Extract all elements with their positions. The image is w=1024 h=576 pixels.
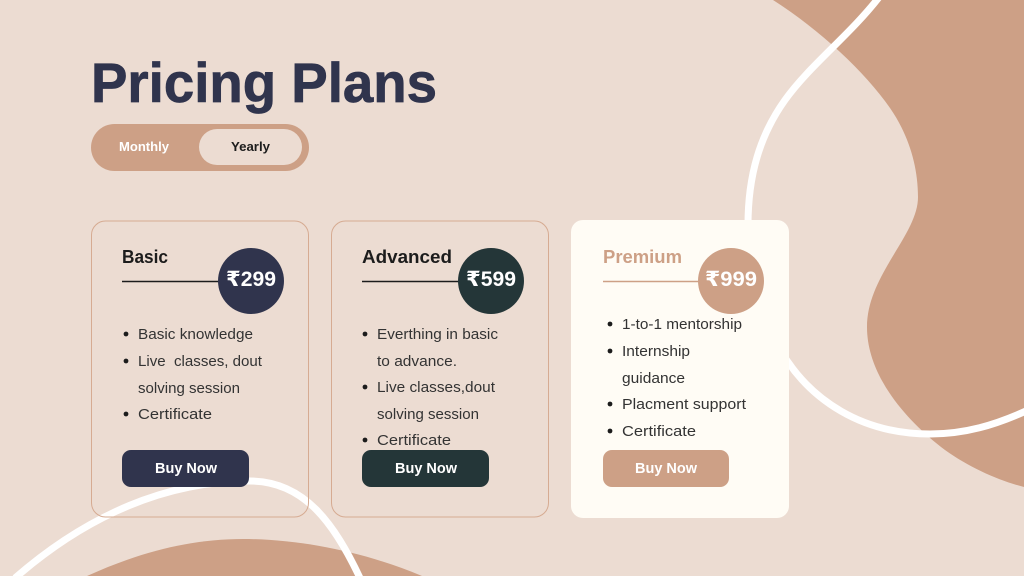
title: Pricing Plans (91, 51, 437, 114)
feature list: basic: Basic knowledge (138, 326, 253, 343)
panel: advanced plan (332, 221, 548, 517)
price badge: basic: ₹299 (226, 268, 276, 291)
button: premium buy now (603, 450, 729, 487)
feature list: advanced (363, 326, 499, 449)
button: advanced buy now: Buy Now (395, 460, 457, 477)
feature list: premium: Internship (622, 343, 690, 360)
feature list: advanced: solving session (377, 406, 479, 423)
price badge: basic (122, 248, 284, 314)
plan name: premium: Premium (603, 247, 682, 267)
feature list: premium: 1-to-1 mentorship (622, 316, 742, 333)
price badge: premium: ₹999 (705, 268, 757, 291)
background blob: bottom (87, 539, 422, 576)
billing toggle: Monthly (119, 139, 170, 154)
decorative curve: bottom (15, 481, 360, 576)
feature list: premium: Placment support (622, 396, 747, 413)
billing toggle (91, 124, 309, 171)
button: premium buy now: Buy Now (635, 460, 697, 477)
billing toggle: Yearly (231, 139, 271, 154)
background blob: top right (773, 0, 1024, 487)
panel: premium plan (571, 220, 789, 518)
feature list: premium: Certificate (622, 423, 696, 440)
feature list: basic (124, 326, 263, 423)
feature list: premium (608, 316, 747, 440)
feature list: basic: Certificate (138, 406, 212, 423)
feature list: basic: Live classes, dout (138, 353, 263, 370)
panel: basic plan (92, 221, 308, 517)
button: basic buy now (122, 450, 249, 487)
button: basic buy now: Buy Now (155, 460, 217, 477)
feature list: advanced: Everthing in basic (377, 326, 499, 343)
button: advanced buy now (362, 450, 489, 487)
price badge: advanced (362, 248, 524, 314)
price badge: advanced: ₹599 (466, 268, 516, 291)
feature list: advanced: Live classes,dout (377, 379, 496, 396)
feature list: advanced: to advance. (377, 353, 457, 370)
feature list: premium: guidance (622, 370, 685, 387)
plan name: basic: Basic (122, 247, 168, 267)
price badge: premium (603, 248, 764, 314)
feature list: basic: solving session (138, 380, 240, 397)
plan name: advanced: Advanced (362, 247, 452, 267)
feature list: advanced: Certificate (377, 432, 451, 449)
decorative curve: right (748, 0, 1024, 434)
